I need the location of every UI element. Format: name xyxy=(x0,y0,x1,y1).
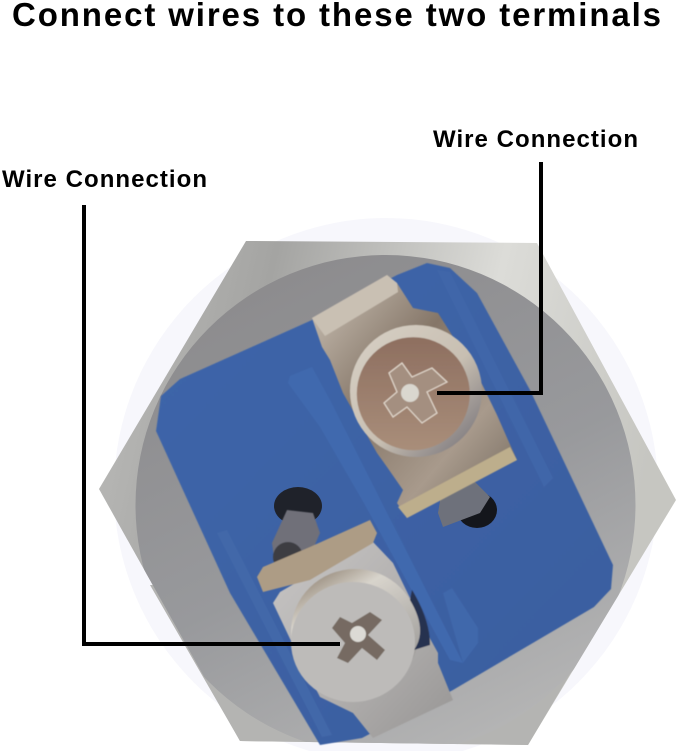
blue tab: lower right xyxy=(443,588,478,663)
label: right: Wire Connection xyxy=(433,126,638,153)
hole: left wire xyxy=(274,487,322,525)
panel: switch rear photo illustration xyxy=(99,218,676,751)
blue ridge: upper centre xyxy=(288,367,463,663)
highlight band: upper terminal xyxy=(312,275,398,336)
blue ridge: lower left xyxy=(217,530,332,737)
hexagon lower shading xyxy=(150,585,620,745)
solder tab: upper xyxy=(398,447,517,518)
hexagon nut xyxy=(99,241,676,745)
grey round body xyxy=(136,255,636,751)
screw: upper head xyxy=(357,337,470,450)
screw cross: lower xyxy=(332,612,385,663)
callout: left wire connection xyxy=(2,166,340,644)
hole: right wire xyxy=(457,492,497,528)
terminal: lower xyxy=(257,510,453,738)
leader line: left xyxy=(84,205,340,644)
screw: lower shadow xyxy=(410,590,430,650)
screw cross: upper xyxy=(384,363,447,423)
leader line: right xyxy=(437,162,541,393)
callout: right wire connection xyxy=(433,126,638,393)
terminal: upper xyxy=(312,275,517,518)
wire: right xyxy=(438,477,490,527)
blue ridge: upper right xyxy=(437,270,553,487)
screw: lower rim xyxy=(291,569,419,695)
soft halo behind switch xyxy=(114,218,658,751)
screw: lower head xyxy=(291,582,415,702)
screw: upper rim xyxy=(350,325,482,457)
label: left: Wire Connection xyxy=(2,166,207,193)
wire: left xyxy=(272,510,320,572)
solder tab: lower xyxy=(257,520,377,592)
blue terminal base xyxy=(156,263,613,745)
